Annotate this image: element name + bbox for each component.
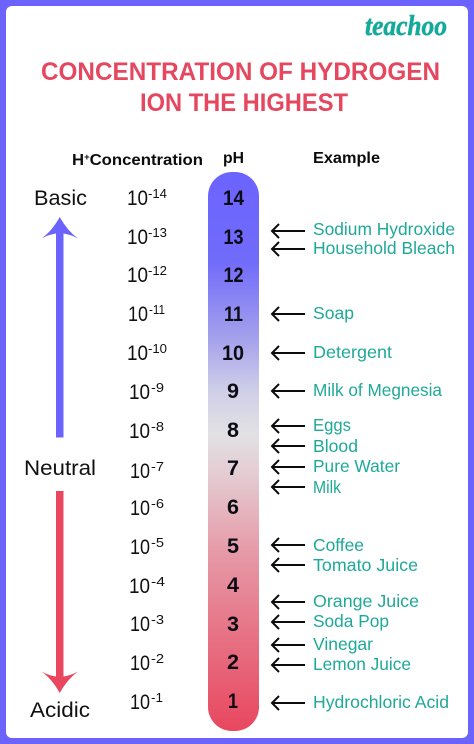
example labels: Soap	[313, 303, 354, 323]
H+ concentration column: -1	[151, 690, 163, 705]
H+ concentration column: -10	[148, 341, 167, 356]
H+ concentration column	[127, 186, 167, 714]
example labels: Orange Juice	[313, 591, 419, 611]
H+ concentration column: -9	[151, 380, 164, 395]
H+ concentration column: 10	[127, 264, 148, 287]
logo: teachoo: teachoo	[365, 11, 447, 42]
pH numbers: 8	[227, 419, 239, 442]
example labels: Milk of Megnesia	[313, 380, 442, 400]
H+ concentration column: 10	[128, 303, 148, 326]
example labels: Household Bleach	[313, 238, 455, 258]
example labels	[313, 219, 455, 712]
example labels: Blood	[313, 436, 358, 456]
pointer arrows	[272, 224, 305, 710]
H+ concentration column: 10	[129, 420, 150, 443]
H+ concentration column: 10	[130, 536, 150, 559]
pH numbers: 5	[227, 535, 239, 558]
H+ concentration column: 10	[127, 187, 148, 210]
H+ concentration column: -12	[148, 263, 167, 278]
example labels: Hydrochloric Acid	[313, 692, 449, 712]
H+ concentration column: -6	[151, 496, 164, 511]
pH numbers: 13	[224, 226, 244, 249]
scale labels and direction arrows: Basic	[34, 187, 87, 210]
title: ION THE HIGHEST	[140, 89, 348, 117]
example labels: Tomato Juice	[313, 555, 418, 575]
column headings	[72, 150, 380, 169]
pH numbers: 4	[227, 574, 239, 597]
H+ concentration column: 10	[129, 381, 150, 404]
pH numbers: 2	[227, 651, 239, 674]
pH numbers: 1	[228, 690, 238, 713]
pH numbers	[222, 187, 244, 713]
example labels: Coffee	[313, 535, 364, 555]
column headings: +	[84, 152, 90, 162]
pH numbers: 14	[223, 187, 244, 210]
H+ concentration column: 10	[127, 342, 148, 365]
arrow: down toward acidic	[42, 491, 78, 693]
H+ concentration column: 10	[129, 575, 150, 598]
pH numbers: 3	[227, 613, 239, 636]
H+ concentration column: 10	[127, 226, 148, 249]
H+ concentration column: -7	[151, 459, 164, 474]
example labels: Detergent	[313, 342, 392, 362]
H+ concentration column: -2	[151, 651, 164, 666]
column headings: Example	[313, 150, 380, 167]
scale labels and direction arrows: Acidic	[30, 699, 90, 722]
example labels: Sodium Hydroxide	[313, 219, 455, 239]
pH numbers: 12	[224, 264, 244, 287]
arrow: up toward basic	[42, 217, 78, 438]
example labels: Pure Water	[313, 456, 400, 476]
pH numbers: 6	[227, 496, 239, 519]
H+ concentration column: -3	[151, 612, 164, 627]
scale labels and direction arrows	[24, 187, 96, 722]
H+ concentration column: 10	[130, 460, 150, 483]
title	[41, 58, 440, 117]
H+ concentration column: 10	[130, 613, 150, 636]
example labels: Vinegar	[313, 634, 373, 654]
example labels: Milk	[313, 477, 341, 497]
column headings: Concentration	[90, 152, 203, 169]
example labels: Soda Pop	[313, 611, 389, 631]
H+ concentration column: 10	[130, 497, 150, 520]
pH numbers: 7	[227, 457, 239, 480]
scale labels and direction arrows: Neutral	[24, 457, 96, 480]
H+ concentration column: -8	[151, 419, 164, 434]
column headings: pH	[223, 150, 244, 167]
pH numbers: 10	[222, 342, 244, 365]
example labels: Lemon Juice	[313, 654, 411, 674]
pH numbers: 9	[227, 380, 239, 403]
column headings: H	[72, 152, 84, 169]
H+ concentration column: -5	[151, 535, 164, 550]
H+ concentration column: -14	[148, 186, 167, 201]
H+ concentration column: -11	[149, 302, 165, 317]
pH numbers: 11	[224, 303, 243, 326]
H+ concentration column: -4	[151, 574, 165, 589]
pH gradient bar	[208, 172, 259, 731]
H+ concentration column: 10	[130, 652, 150, 675]
title: CONCENTRATION OF HYDROGEN	[41, 58, 440, 86]
example labels: Eggs	[313, 415, 351, 435]
H+ concentration column: 10	[130, 691, 150, 714]
H+ concentration column: -13	[148, 225, 167, 240]
